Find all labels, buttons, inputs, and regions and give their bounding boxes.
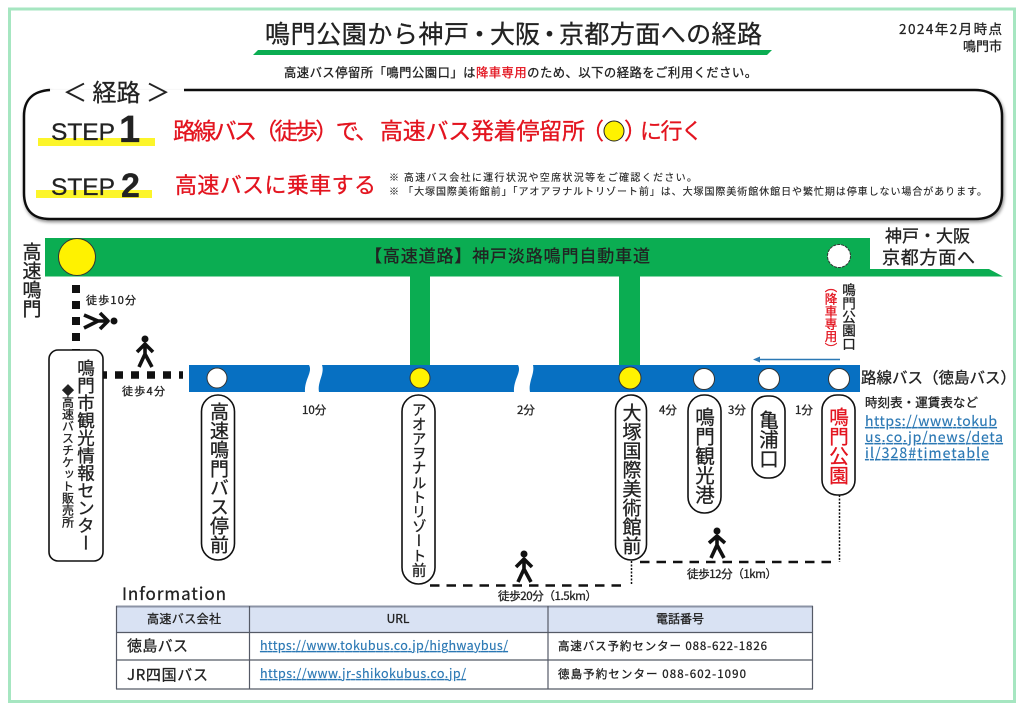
- step 1 instruction: [173, 112, 703, 146]
- stop label: 鳴門観光港: 鳴門観光港: [690, 407, 720, 504]
- destination label: 神戸・大阪: [885, 222, 970, 247]
- label: 鳴門公園口: 鳴門公園口: [839, 283, 859, 351]
- walking route: center to bus stop: [99, 336, 183, 399]
- row: 徳島バス: 高速バス予約センター 088-622-1826: [558, 638, 767, 654]
- notes: ※ 「大塚国際美術館前」「アオアヲナルトリゾート前」は、大塚国際美術館休館日や繁忙期は停車しない場合があります。: [389, 183, 987, 198]
- expressway band: [45, 238, 1003, 366]
- stop label: 高速鳴門バス停前: 高速鳴門バス停前: [206, 402, 233, 554]
- expressway label: 【高速道路】神戸淡路鳴門自動車道: [365, 242, 650, 267]
- step 2 label: 2: [121, 167, 140, 205]
- travel times: 2分: [517, 402, 535, 418]
- timetable link block: il/328#timetable: [865, 443, 989, 463]
- local bus label: 路線バス（徳島バス）: [861, 366, 1016, 388]
- step 1 instruction: に行く: [640, 114, 703, 146]
- walk time 12 minutes: 徒歩12分（1km）: [687, 566, 777, 582]
- information table: [116, 606, 813, 689]
- date and issuer: 鳴門市: [963, 36, 1002, 55]
- table header: URL: [387, 610, 410, 627]
- row: JR四国バス: https://www.jr-shikokubus.co.jp/: [260, 663, 466, 682]
- row: JR四国バス: [127, 663, 746, 685]
- icon: walker: [137, 336, 153, 367]
- title: 鳴門公園から神戸: [265, 15, 469, 51]
- notes: ※ 高速バス会社に運行状況や空席状況等をご確認ください。: [389, 169, 697, 184]
- walking route: アオアヲナルトリゾート前 to 大塚国際美術館前: [430, 550, 632, 604]
- title: ・: [467, 15, 492, 51]
- travel times: 1分: [795, 402, 813, 418]
- timetable link block: 時刻表・運賃表など: [865, 392, 978, 411]
- travel times: 3分: [728, 402, 746, 418]
- step 2 label: [36, 167, 152, 205]
- walk time 4 minutes: 徒歩4分: [122, 383, 165, 399]
- row: JR四国バス: 徳島予約センター 088-602-1090: [558, 666, 746, 682]
- stop label: 鳴門市観光情報センター: 鳴門市観光情報センター: [74, 359, 98, 552]
- stop label: 鳴門市観光情報センター: ◆高速バスチケット販売所: [60, 384, 76, 528]
- date and issuer: [899, 18, 1002, 55]
- timetable link block: us.co.jp/news/deta: [865, 427, 1003, 447]
- table header: [147, 610, 704, 627]
- travel times: 4分: [659, 402, 677, 418]
- stop: 高速鳴門 highway: [58, 238, 96, 276]
- title: 京都方面への経路: [559, 15, 762, 51]
- notes: [389, 169, 987, 198]
- step 1 label: [38, 109, 155, 151]
- row: 徳島バス: 徳島バス: [127, 635, 188, 656]
- walk time 10 minutes: 徒歩10分: [86, 292, 136, 308]
- label: 降車専用: （降車専用）: [822, 280, 840, 355]
- title: ・: [537, 15, 562, 51]
- panel heading: ＜ 経路 ＞: [63, 73, 170, 108]
- walking route: 大塚国際美術館前 to 鳴門公園: [640, 495, 840, 582]
- step 1 label: STEP: [51, 119, 115, 146]
- travel times: [302, 402, 813, 418]
- subtitle notice: 高速バス停留所「鳴門公園口」は降車専用のため、以下の経路をご利用ください。: [284, 63, 757, 81]
- step 1 instruction: ）: [624, 112, 647, 146]
- label: 高速鳴門: 高速鳴門: [18, 242, 46, 318]
- stop label: アオアヲナルトリゾート前: [402, 395, 435, 584]
- date and issuer: 2024年2月時点: [899, 18, 1002, 38]
- travel times: 10分: [302, 402, 327, 418]
- stop label: 鳴門公園: [822, 395, 855, 495]
- destination label: [882, 222, 975, 270]
- icon: walker: [516, 550, 532, 582]
- panel: route steps: [24, 73, 1002, 219]
- stop label: 亀浦口: [752, 396, 785, 478]
- row: 徳島バス: https://www.tokubus.co.jp/highwaybus/: [260, 635, 508, 654]
- icon: walker sideways: [84, 313, 118, 329]
- icon: walker: [709, 528, 725, 558]
- stop label: 鳴門市観光情報センター: [49, 350, 103, 561]
- timetable link block: [865, 392, 1003, 463]
- row: JR四国バス: JR四国バス: [127, 664, 208, 685]
- step 1 instruction: 路線バス（徒歩）で、: [173, 112, 378, 146]
- stop label: アオアヲナルトリゾート前: アオアヲナルトリゾート前: [408, 402, 430, 578]
- step 1 instruction: （: [581, 112, 604, 146]
- step 2 instruction: 高速バスに乗車する: [175, 168, 376, 200]
- stops: [207, 367, 850, 390]
- walk time 20 minutes: 徒歩20分（1.5km）: [498, 588, 597, 604]
- step 2 label: STEP: [51, 174, 115, 201]
- stop: 鳴門公園口 highway: [828, 244, 850, 268]
- title: 大阪: [490, 15, 540, 51]
- row: 徳島バス: [127, 635, 767, 656]
- stop label: 大塚国際美術館前: 大塚国際美術館前: [618, 403, 646, 555]
- information heading: Information: [122, 580, 226, 605]
- timetable link block: https://www.tokub: [865, 411, 997, 431]
- stop label: 亀浦口: 亀浦口: [754, 410, 784, 468]
- table header: 電話番号: [656, 610, 704, 627]
- local bus line: [189, 365, 860, 392]
- walking route: 高速鳴門 to center: [76, 285, 136, 350]
- destination label: 京都方面へ: [882, 244, 975, 270]
- step 1 label: 1: [119, 109, 140, 151]
- stop label: 鳴門公園: 鳴門公園: [824, 407, 854, 485]
- table header: 高速バス会社: [147, 610, 221, 627]
- arrow: bus direction: [753, 356, 840, 362]
- step 1 instruction: 高速バス発着停留所: [380, 112, 585, 146]
- title: [253, 15, 772, 55]
